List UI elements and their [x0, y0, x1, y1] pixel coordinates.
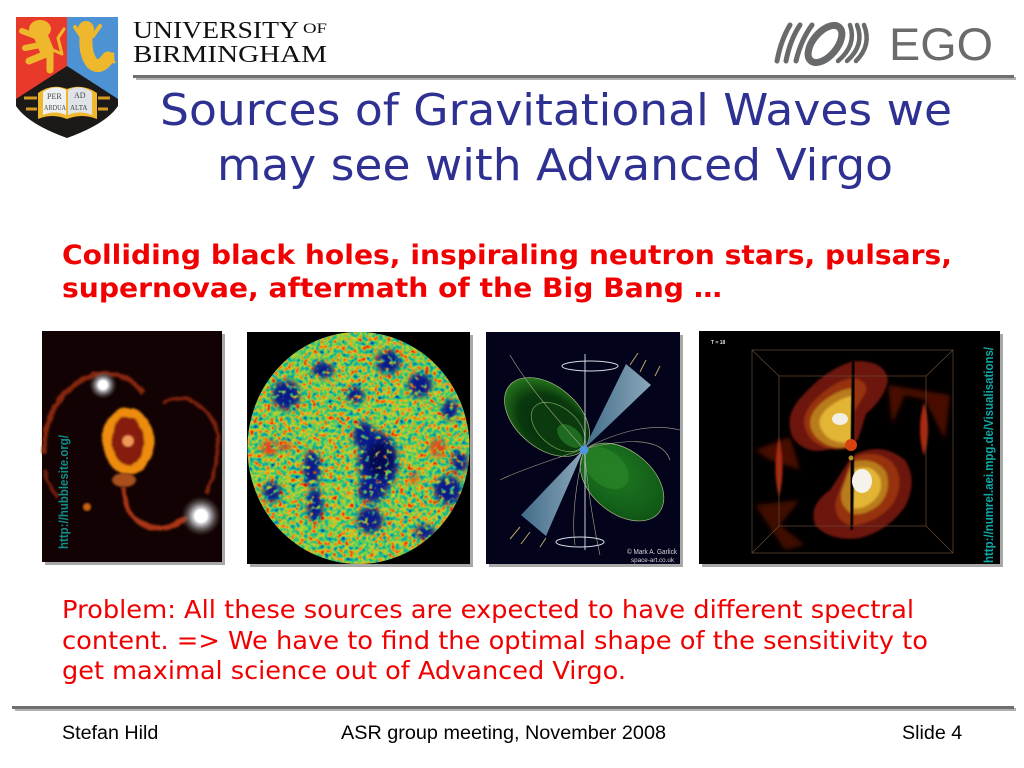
text block: problem statement: content. => We have to find the optimal shape of the sensitivity to [62, 626, 928, 655]
image: numerical relativity black hole merger: http://numrel.aei.mpg.de/Visualisations/ [982, 347, 996, 563]
logo: University of Birmingham crest: PER [47, 92, 62, 101]
footer: author: Stefan Hild [62, 722, 158, 744]
image: pulsar illustration [486, 332, 683, 567]
title: Sources of Gravitational Waves we [160, 85, 952, 136]
image: WMAP cosmic microwave background sphere [247, 332, 473, 567]
image: supernova 1987A rings [42, 331, 225, 565]
logo: University of Birmingham wordmark: BIRMINGHAM [133, 41, 327, 68]
subtitle: list of sources: supernovae, aftermath of the Big Bang … [62, 273, 722, 304]
footer: meeting: ASR group meeting, November 2008 [341, 722, 666, 744]
logo: University of Birmingham wordmark [133, 17, 327, 68]
image: numerical relativity black hole merger: T = 18 [711, 340, 726, 346]
footer: slide number: Slide 4 [902, 722, 962, 744]
logo: University of Birmingham crest: ARDUA [44, 104, 66, 112]
subtitle: list of sources: Colliding black holes, inspiraling neutron stars, pulsars, [62, 240, 952, 271]
logo: University of Birmingham crest [16, 17, 118, 138]
logo: University of Birmingham wordmark: UNIVERSITY [133, 17, 299, 44]
image: pulsar illustration: © Mark A. Garlick [627, 548, 677, 556]
logo: EGO: EGO [889, 19, 993, 70]
logo: University of Birmingham wordmark: OF [303, 21, 327, 37]
text block: problem statement [62, 595, 928, 685]
title: may see with Advanced Virgo [217, 140, 893, 191]
logo: EGO [777, 19, 993, 70]
subtitle: list of sources [62, 240, 952, 304]
footer rule [12, 706, 1016, 711]
text block: problem statement: Problem: All these sources are expected to have different spectral [62, 595, 914, 624]
image: supernova 1987A rings: http://hubblesite.org/ [57, 435, 71, 549]
title [160, 85, 952, 191]
logo: University of Birmingham crest: AD [74, 91, 86, 100]
text block: problem statement: get maximal science out of Advanced Virgo. [62, 656, 626, 685]
image: numerical relativity black hole merger [699, 331, 1003, 567]
image: pulsar illustration: space-art.co.uk [631, 557, 675, 564]
logo: University of Birmingham crest: ALTA [70, 104, 87, 112]
header rule [133, 75, 1016, 80]
